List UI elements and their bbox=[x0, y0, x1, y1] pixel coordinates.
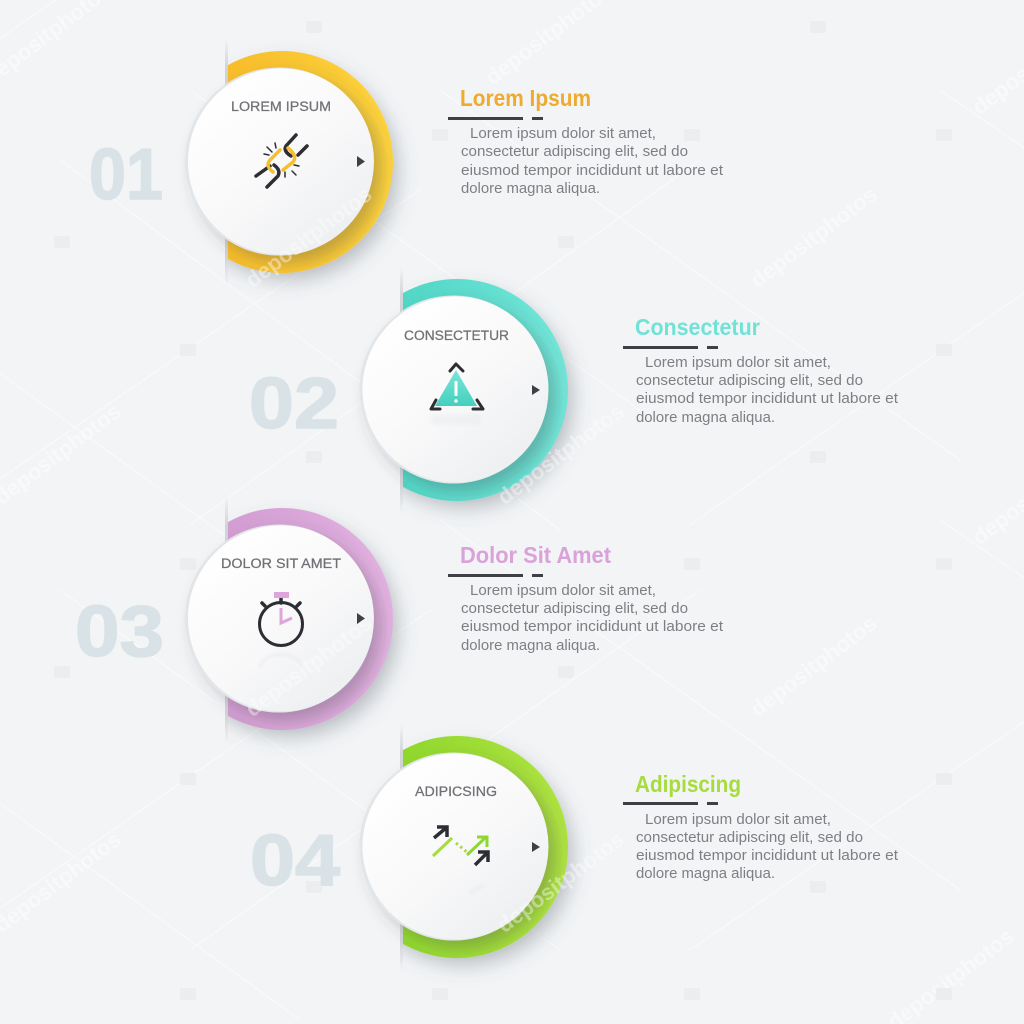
cut shadow strip bbox=[225, 38, 228, 286]
text block 4 bbox=[623, 771, 899, 882]
white disc bbox=[188, 68, 374, 254]
green ring bbox=[403, 736, 583, 975]
text block 3 bbox=[448, 542, 724, 654]
title 4: Adipiscing bbox=[635, 771, 741, 797]
number 03: 03 bbox=[75, 592, 164, 672]
disc rim bbox=[185, 68, 373, 256]
purple ring bbox=[228, 508, 408, 747]
cut shadow strip bbox=[400, 267, 403, 515]
circle label: CONSECTETUR bbox=[404, 328, 509, 343]
panel: step 01 bbox=[89, 38, 724, 286]
body 2 bbox=[636, 354, 899, 426]
icon: stopwatch bbox=[260, 592, 302, 668]
panel: step 04 bbox=[250, 724, 899, 972]
cut shadow strip bbox=[400, 724, 403, 972]
cut shadow strip bbox=[225, 496, 228, 744]
white disc bbox=[188, 526, 374, 712]
watermark pattern: depositphotos bbox=[745, 610, 882, 722]
white disc bbox=[362, 296, 548, 482]
body 1: dolore magna aliqua. bbox=[461, 180, 600, 197]
title 1: Lorem Ipsum bbox=[460, 85, 591, 111]
body 4 bbox=[636, 811, 899, 882]
text block 2 bbox=[623, 314, 899, 426]
title 2: Consectetur bbox=[635, 314, 760, 340]
number 01: 01 bbox=[89, 135, 163, 215]
icon: growth arrows bbox=[433, 827, 488, 893]
yellow ring bbox=[228, 51, 408, 290]
number 04: 04 bbox=[250, 821, 340, 901]
watermark over discs: depositphotos bbox=[492, 398, 629, 510]
body 4: dolore magna aliqua. bbox=[636, 865, 775, 882]
arrow marker bbox=[357, 613, 365, 624]
body 4: Lorem ipsum dolor sit amet, bbox=[645, 811, 831, 828]
arrow marker bbox=[532, 842, 540, 852]
body 1: eiusmod tempor incididunt ut labore et bbox=[461, 162, 724, 179]
watermark over discs: depositphotos bbox=[240, 181, 377, 293]
body 2: eiusmod tempor incididunt ut labore et bbox=[636, 390, 899, 407]
underline 1 bbox=[448, 117, 543, 120]
body 3: consectetur adipiscing elit, sed do bbox=[461, 600, 688, 617]
body 2: consectetur adipiscing elit, sed do bbox=[636, 372, 863, 389]
body 1: consectetur adipiscing elit, sed do bbox=[461, 143, 688, 160]
body 2: dolore magna aliqua. bbox=[636, 409, 775, 426]
circle label: DOLOR SIT AMET bbox=[221, 556, 341, 571]
body 1: Lorem ipsum dolor sit amet, bbox=[470, 125, 656, 142]
disc rim bbox=[185, 524, 373, 712]
icon: broken chain bbox=[256, 135, 307, 187]
icon: warning triangle bbox=[431, 364, 483, 425]
circle label: LOREM IPSUM bbox=[231, 99, 331, 114]
body 3: dolore magna aliqua. bbox=[461, 637, 600, 654]
watermark pattern: depositphotos bbox=[745, 181, 882, 293]
disc rim bbox=[360, 296, 548, 484]
underline 4 bbox=[623, 802, 718, 805]
body 4: consectetur adipiscing elit, sed do bbox=[636, 829, 863, 846]
watermark over discs: depositphotos bbox=[240, 610, 377, 722]
disc rim bbox=[360, 752, 548, 940]
number 02: 02 bbox=[249, 364, 339, 444]
underline 2 bbox=[623, 346, 718, 349]
circle label: ADIPICSING bbox=[415, 784, 497, 799]
body 1 bbox=[461, 125, 724, 197]
body 3: eiusmod tempor incididunt ut labore et bbox=[461, 618, 724, 635]
arrow marker bbox=[357, 156, 365, 167]
text block 1 bbox=[448, 85, 724, 197]
arrow marker bbox=[532, 385, 540, 395]
watermark over discs bbox=[240, 181, 629, 938]
watermark over discs: depositphotos bbox=[492, 826, 629, 938]
title 3: Dolor Sit Amet bbox=[460, 542, 611, 568]
white disc bbox=[362, 754, 548, 940]
body 4: eiusmod tempor incididunt ut labore et bbox=[636, 847, 899, 864]
body 3: Lorem ipsum dolor sit amet, bbox=[470, 582, 656, 599]
body 3 bbox=[461, 582, 724, 654]
underline 3 bbox=[448, 574, 543, 577]
body 2: Lorem ipsum dolor sit amet, bbox=[645, 354, 831, 371]
panel: step 03 bbox=[75, 496, 724, 744]
panel: step 02 bbox=[249, 267, 899, 515]
teal ring bbox=[403, 279, 583, 518]
